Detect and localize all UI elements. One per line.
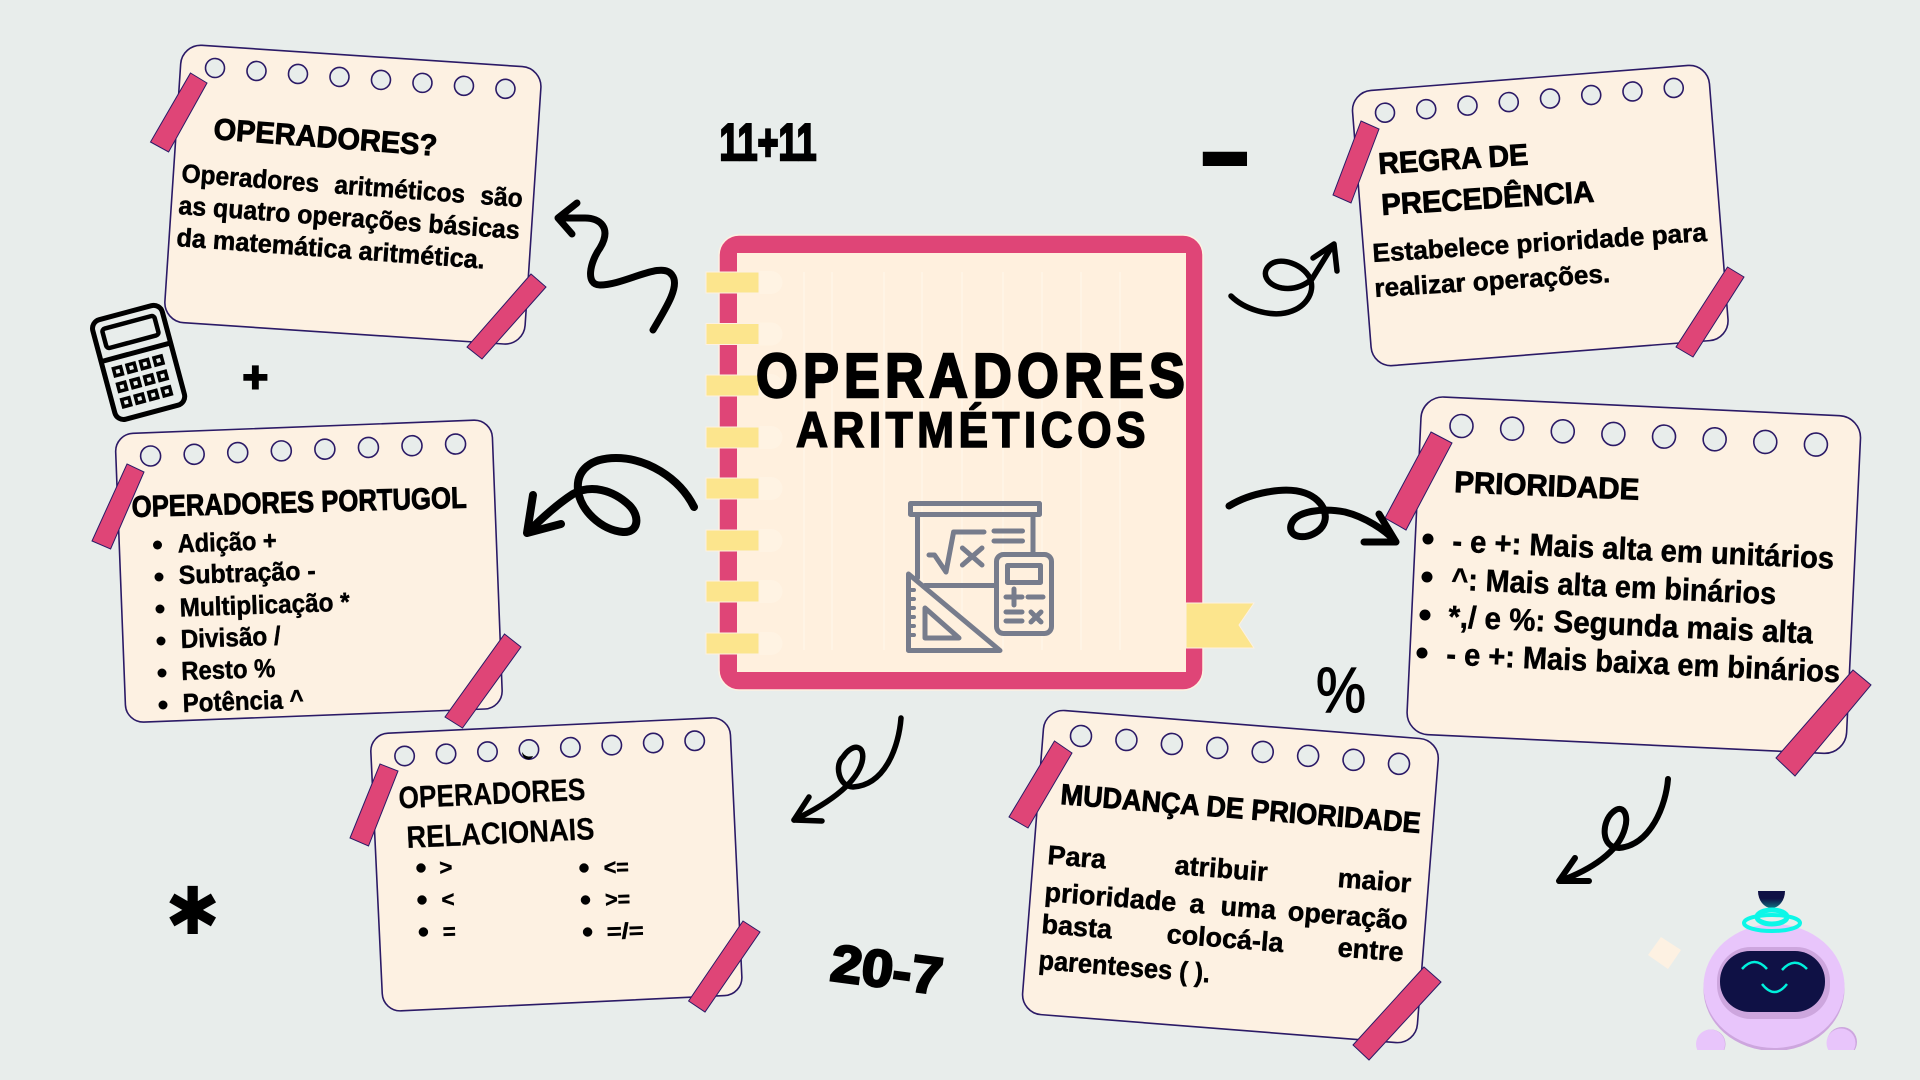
bullet list (153, 525, 351, 718)
heading: REGRA DE (1377, 139, 1529, 181)
bullet list: Multiplicação * (179, 587, 351, 622)
title (756, 342, 1190, 458)
bullet list: Resto % (181, 653, 276, 686)
notebook spiral rings (706, 271, 782, 655)
bullet list: ^: Mais alta em binários (1451, 562, 1777, 611)
arrow: from center to operadores note (558, 203, 675, 330)
operator lists (416, 854, 644, 944)
heading (398, 772, 595, 855)
heading: OPERADORES (398, 772, 586, 815)
note holes (205, 58, 516, 99)
tape top (1009, 741, 1072, 828)
arrow: center to relacionais note (794, 718, 901, 821)
body text: realizar operações. (1373, 258, 1611, 303)
bullet list: Potência ^ (182, 684, 304, 718)
body text: entre (1337, 932, 1405, 967)
tape top (1333, 121, 1379, 203)
tape top (150, 73, 207, 152)
bullet list: *,/ e %: Segunda mais alta (1448, 599, 1815, 651)
decoration: asterisk: ✱ (165, 873, 220, 950)
bullet list: Adição + (177, 525, 277, 558)
tape bottom (1353, 967, 1441, 1060)
bullet list: - e +: Mais alta em unitários (1452, 524, 1835, 576)
body text: prioridade (1044, 877, 1178, 917)
body text: as quatro operações básicas (178, 190, 521, 245)
heading: RELACIONAIS (406, 811, 595, 855)
heading: PRECEDÊNCIA (1380, 175, 1595, 222)
body text (1038, 840, 1413, 988)
arrow: from center to prioridade note (1229, 490, 1396, 542)
arrow: from center to regra note (1231, 244, 1337, 314)
note: prioridade (1385, 396, 1871, 776)
title: OPERADORES (756, 342, 1190, 411)
bullet list: Divisão / (180, 621, 281, 654)
operator lists: <= (603, 854, 629, 880)
body text: Para (1047, 840, 1107, 875)
decoration: 20-7: 20-7 (827, 934, 946, 1007)
operator lists: > (439, 855, 453, 880)
note holes (1449, 414, 1828, 457)
body text (176, 158, 524, 275)
arrow: prioridade to mudança note (1559, 779, 1668, 881)
heading (1377, 139, 1595, 222)
body text: da matemática aritmética. (176, 222, 486, 275)
body text: Operadores aritméticos são (181, 158, 524, 213)
operator lists: >= (605, 886, 631, 912)
note holes (1375, 78, 1684, 123)
note holes (1070, 725, 1410, 775)
note: mudança de prioridade (1009, 709, 1441, 1060)
tape top (1385, 432, 1452, 530)
note holes (140, 434, 466, 466)
operator lists: =/= (606, 918, 644, 944)
tape bottom (445, 634, 521, 728)
heading: MUDANÇA DE PRIORIDADE (1059, 779, 1422, 840)
note: operadores portugol (92, 420, 521, 728)
robot mascot (1648, 891, 1857, 1058)
bullet list: - e +: Mais baixa em binários (1446, 637, 1841, 689)
arrow: from center to portugol note (527, 458, 694, 533)
tape bottom (1676, 267, 1744, 357)
heading: OPERADORES PORTUGOL (131, 482, 467, 524)
body text: operação (1287, 896, 1409, 936)
bullet list: Subtração - (178, 555, 316, 590)
operator lists: = (442, 919, 456, 944)
body text: a (1189, 888, 1207, 920)
body text (1371, 217, 1708, 303)
body text: parenteses ( ). (1038, 945, 1211, 988)
tape bottom (467, 274, 546, 359)
tape top (92, 464, 144, 549)
bullet list (1416, 524, 1841, 689)
icon: calculator (90, 303, 187, 421)
note: operadores? (150, 44, 546, 359)
decorative diamond (1648, 937, 1681, 969)
note: operadores relacionais (350, 717, 760, 1012)
icon: math board, calculator and set square (908, 504, 1052, 650)
decoration: plus sign: + (242, 353, 268, 402)
decoration: 11+11: 11+11 (720, 114, 816, 172)
decoration: minus sign: - (1196, 82, 1254, 216)
heading: PRIORIDADE (1454, 466, 1640, 507)
heading: OPERADORES? (212, 113, 438, 163)
body text: colocá-la (1166, 919, 1286, 958)
tape bottom (1776, 670, 1871, 776)
operator lists: < (441, 887, 455, 912)
tape bottom (689, 921, 760, 1012)
body text: basta (1041, 909, 1113, 945)
body text: maior (1337, 863, 1413, 899)
bookmark ribbon (1186, 603, 1254, 648)
tape top (350, 764, 398, 846)
title: ARITMÉTICOS (796, 402, 1150, 458)
note holes (394, 731, 705, 766)
note: regra de precedência (1333, 64, 1744, 367)
body text: Estabelece prioridade para (1371, 217, 1708, 268)
central notebook panel (706, 235, 1254, 690)
body text: uma (1219, 891, 1278, 925)
body text: atribuir (1174, 850, 1269, 887)
decoration: percent sign: % (1316, 654, 1366, 726)
